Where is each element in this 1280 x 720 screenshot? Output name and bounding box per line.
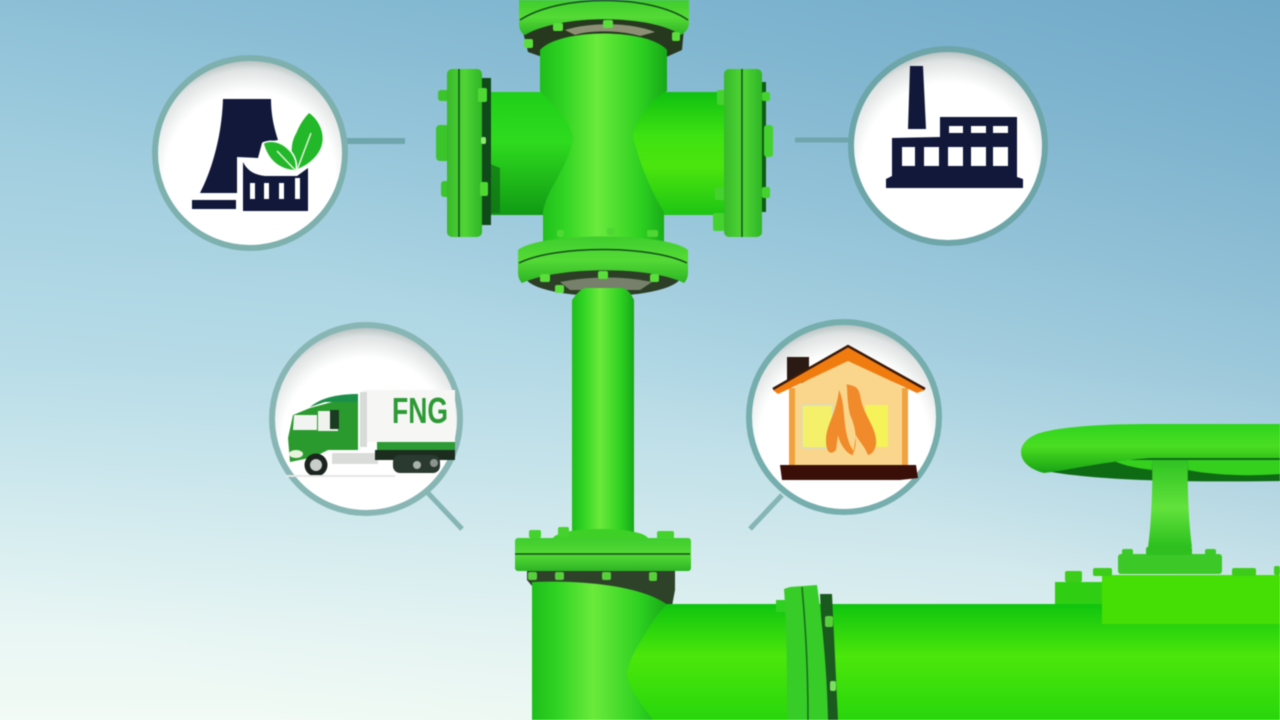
top flange underside (522, 13, 684, 58)
connector: house (750, 495, 782, 529)
lower flange (515, 527, 691, 581)
valve stem (1148, 460, 1192, 547)
long horizontal pipe (627, 604, 1280, 720)
roof deflector (310, 394, 358, 407)
valve small block (1055, 582, 1105, 604)
factory windows (250, 178, 300, 199)
right flange (713, 69, 773, 237)
icon: house (773, 346, 925, 480)
roof (773, 347, 925, 394)
lower vertical pipe (532, 582, 668, 720)
valve stem base (1118, 547, 1222, 574)
left branch pipe (484, 92, 600, 215)
icon: cooling tower and factory (192, 99, 308, 211)
road (286, 475, 395, 477)
icon: truck (288, 390, 455, 476)
horizontal pipe flange (776, 585, 838, 720)
hand wheel front rim (1021, 424, 1280, 473)
valve main block (1102, 575, 1280, 624)
upper pipe cross fitting (436, 0, 773, 296)
right branch pipe backing (610, 92, 726, 215)
trailer stripe (377, 442, 455, 450)
callout: industrial factory (851, 49, 1045, 243)
right window (865, 405, 888, 447)
vertical body (540, 34, 667, 245)
left pipe shadow (488, 163, 500, 213)
hand wheel rear rim (1040, 456, 1280, 481)
walls (789, 358, 908, 465)
callout: FNG truck (272, 325, 460, 513)
bottom flange (518, 228, 688, 296)
block bolts (1065, 566, 1280, 582)
left flange (436, 69, 491, 237)
rear wheels (393, 455, 440, 473)
front wheel (304, 454, 328, 476)
circle frame (749, 322, 939, 512)
circle frame (851, 49, 1045, 243)
flame (826, 384, 876, 455)
cab (288, 395, 358, 462)
thin vertical pipe (572, 288, 634, 534)
lower pipe elbow (515, 527, 1280, 720)
flange underside (527, 570, 675, 606)
valve assembly (1021, 424, 1280, 624)
connector: truck (427, 492, 462, 529)
left window (802, 405, 833, 448)
chimney (787, 357, 809, 383)
circle frame (155, 58, 345, 248)
trailer (363, 390, 455, 442)
step and chassis (332, 453, 378, 464)
callout: house heating (749, 322, 939, 512)
circle frame (272, 325, 460, 513)
windscreen (293, 415, 317, 430)
headlight (289, 450, 303, 458)
icon: factory (886, 66, 1023, 188)
top flange (519, 0, 689, 48)
trailer label: FNG (392, 390, 448, 431)
callout: biomethane power plant (155, 58, 345, 248)
foundation (780, 465, 918, 480)
right branch pipe nose (633, 92, 726, 215)
connector: factory (795, 138, 852, 142)
connector: biomethane plant (345, 138, 405, 144)
side window (318, 411, 338, 431)
icon: green leaves (263, 112, 323, 171)
